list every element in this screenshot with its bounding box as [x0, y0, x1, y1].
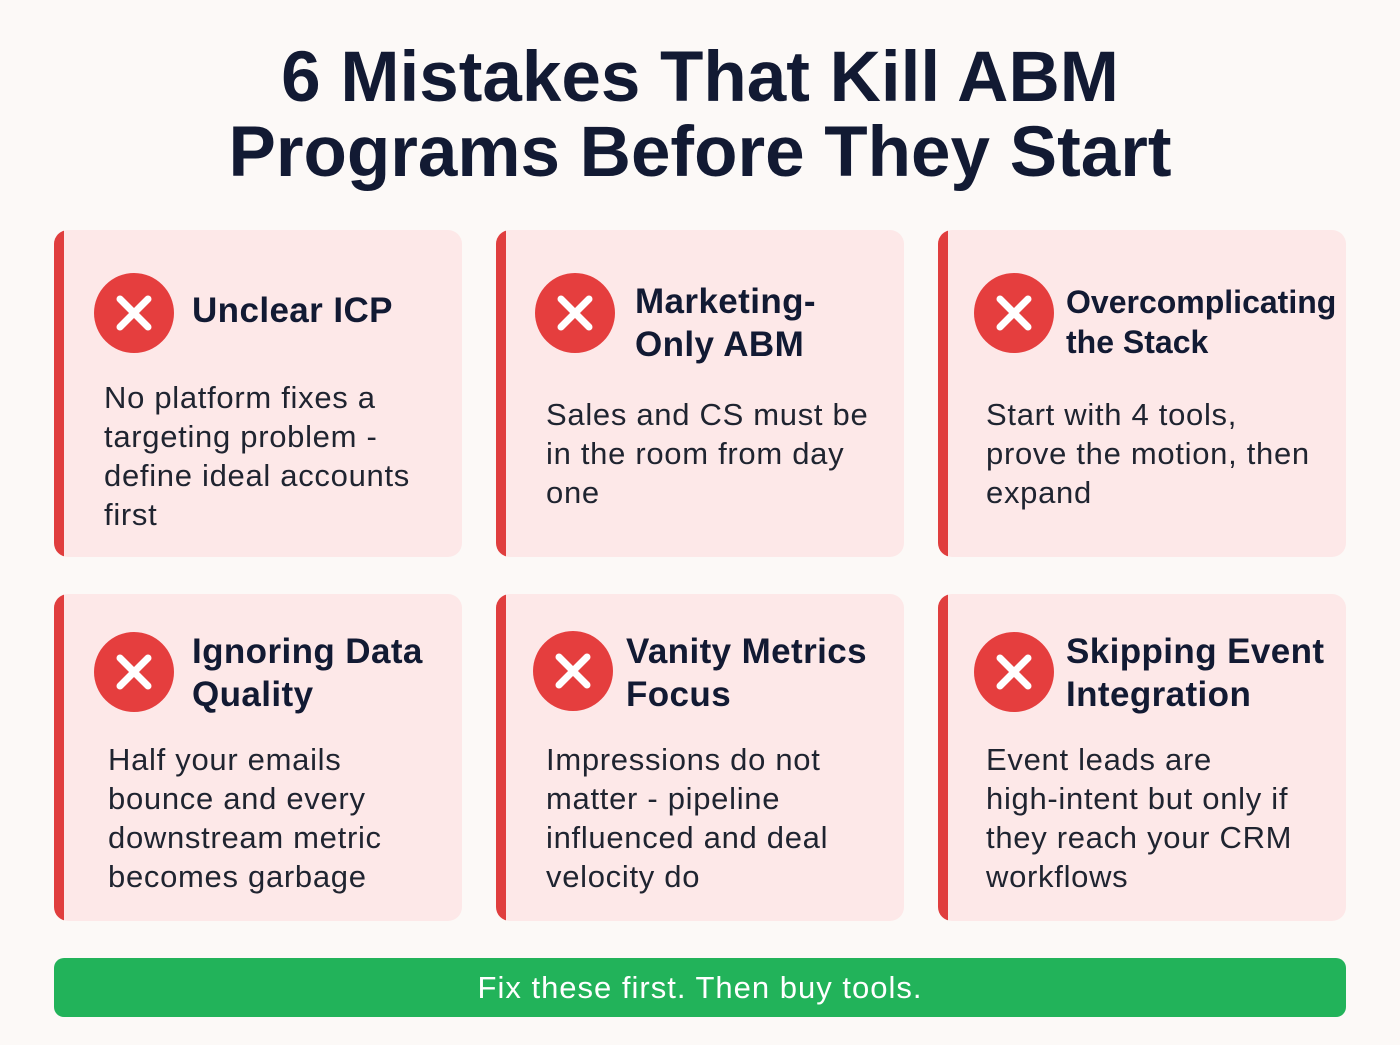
text [546, 742, 828, 894]
heading: the Stack [1066, 324, 1208, 360]
text: influenced and deal [546, 820, 828, 855]
text: in the room from day [546, 436, 844, 471]
heading: Ignoring Data [192, 632, 423, 671]
heading: Unclear ICP [192, 291, 393, 330]
heading: Vanity Metrics [626, 632, 867, 671]
icon: x [533, 631, 613, 711]
icon: x [94, 632, 174, 712]
heading: Only ABM [635, 325, 804, 364]
text: workflows [986, 859, 1128, 894]
text: matter - pipeline [546, 781, 780, 816]
heading: Overcomplicating [1066, 284, 1336, 320]
icon: x [535, 273, 615, 353]
text [986, 742, 1292, 894]
heading [1066, 632, 1324, 714]
heading [192, 632, 423, 714]
text: prove the motion, then [986, 436, 1310, 471]
text: No platform fixes a [104, 380, 376, 415]
text: Impressions do not [546, 742, 821, 777]
panel: event integration [938, 594, 1346, 921]
text: downstream metric [108, 820, 382, 855]
heading [635, 282, 816, 364]
text: one [546, 475, 600, 510]
banner [54, 958, 1346, 1017]
text [986, 397, 1310, 510]
text: first [104, 497, 157, 532]
text [104, 380, 410, 532]
text: bounce and every [108, 781, 366, 816]
text: Half your emails [108, 742, 341, 777]
icon: x [974, 273, 1054, 353]
panel: marketing-only [496, 230, 904, 557]
text: high-intent but only if [986, 781, 1288, 816]
title [228, 38, 1172, 192]
banner: Fix these first. Then buy tools. [478, 970, 922, 1005]
panel: unclear icp [54, 230, 462, 557]
panel: overcomplicating [938, 230, 1346, 557]
text: define ideal accounts [104, 458, 410, 493]
heading [626, 632, 867, 714]
text: Sales and CS must be [546, 397, 868, 432]
icon: x [974, 632, 1054, 712]
heading: Skipping Event [1066, 632, 1324, 671]
text: targeting problem - [104, 419, 378, 454]
text: expand [986, 475, 1092, 510]
panel: data quality [54, 594, 462, 921]
text: they reach your CRM [986, 820, 1292, 855]
title: Programs Before They Start [228, 113, 1172, 192]
heading [1066, 284, 1336, 360]
text: Start with 4 tools, [986, 397, 1237, 432]
panel: vanity metrics [496, 594, 904, 921]
text: Event leads are [986, 742, 1212, 777]
title: 6 Mistakes That Kill ABM [281, 38, 1119, 117]
heading: Integration [1066, 675, 1251, 714]
heading: Marketing- [635, 282, 816, 321]
heading: Quality [192, 675, 313, 714]
text: velocity do [546, 859, 700, 894]
text [546, 397, 868, 510]
heading: Focus [626, 675, 731, 714]
text [108, 742, 382, 894]
text: becomes garbage [108, 859, 367, 894]
icon: x [94, 273, 174, 353]
